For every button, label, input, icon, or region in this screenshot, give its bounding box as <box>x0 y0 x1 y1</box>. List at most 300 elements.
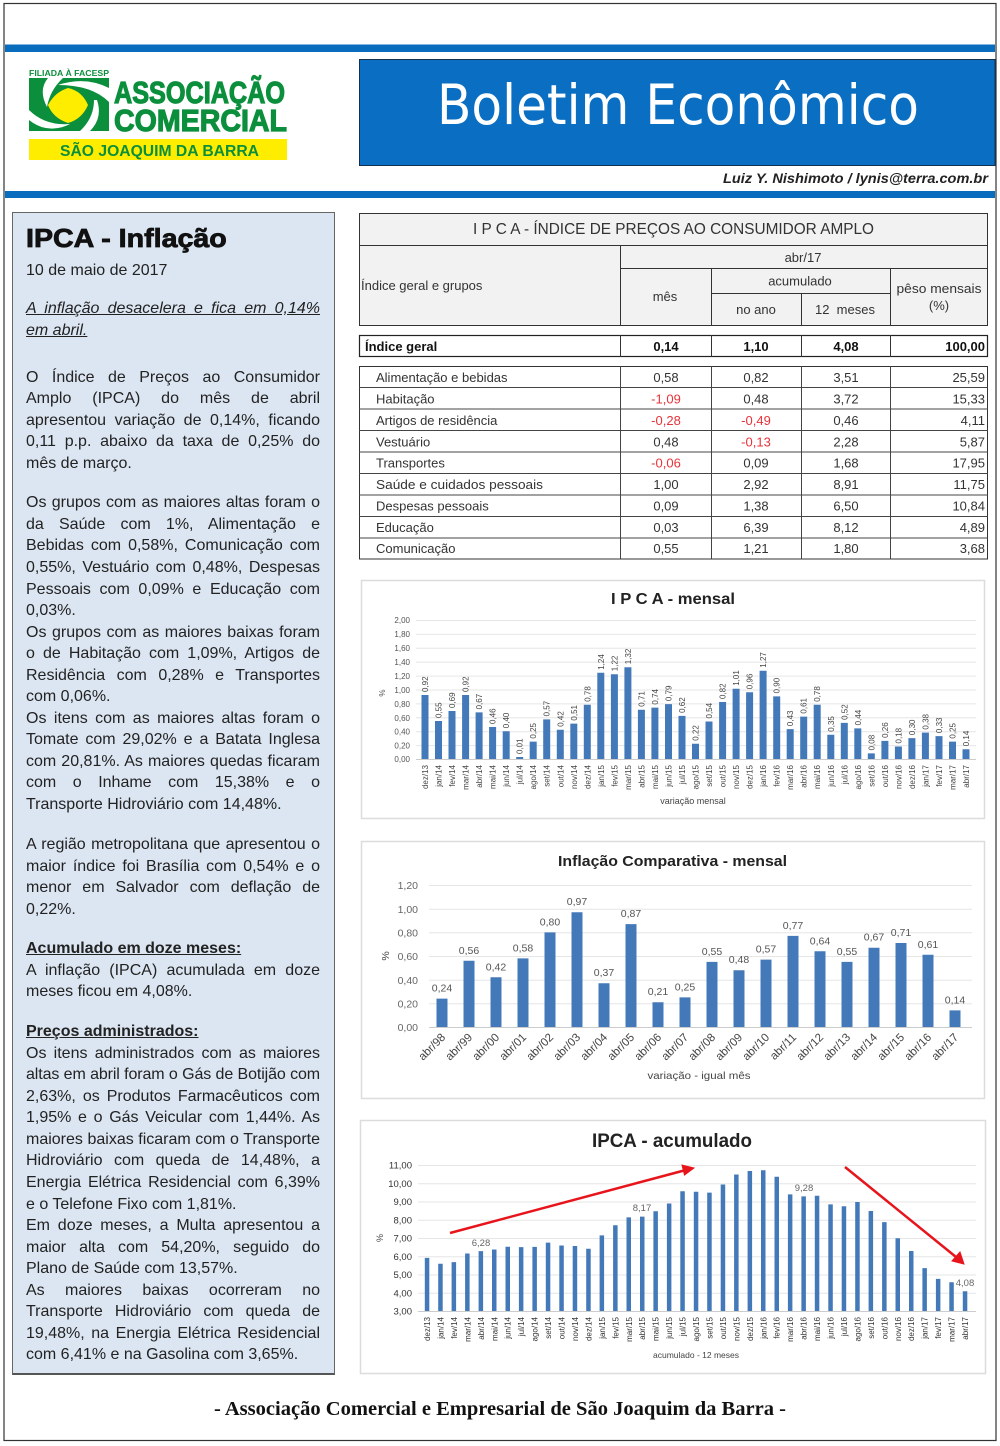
table: IPCA por grupos: 6,50 <box>833 498 859 514</box>
subtitle: A inflação desacelera e fica em 0,14% <box>26 300 320 317</box>
chart: IPCA acumulado: abr/16 <box>800 1316 809 1340</box>
chart: Inflação Comparativa mensal: 0,24 <box>432 983 452 995</box>
chart: IPCA mensal: 0,01 <box>516 738 525 754</box>
chart: Inflação Comparativa mensal <box>362 842 984 1098</box>
table: IPCA por grupos: (%) <box>929 298 949 313</box>
chart: IPCA acumulado: set/14 <box>544 1316 553 1339</box>
section: administered prices <box>26 1023 320 1363</box>
logo: Associação Comercial: COMERCIAL <box>114 103 287 138</box>
chart: IPCA mensal: 0,96 <box>746 673 755 689</box>
chart: IPCA mensal: 0,26 <box>881 722 890 738</box>
paragraph: items: Os itens com as maiores altas foram o <box>26 710 320 727</box>
chart: Inflação Comparativa mensal: % <box>380 951 392 961</box>
chart: Inflação Comparativa mensal: 0,40 <box>398 975 418 987</box>
heading: IPCA - Inflação <box>26 223 227 253</box>
chart: Inflação Comparativa mensal: 0,77 <box>783 920 803 932</box>
chart: Inflação Comparativa mensal: abr/15 <box>876 1032 907 1063</box>
chart: IPCA acumulado: set/16 <box>867 1316 876 1339</box>
chart: IPCA mensal: 0,74 <box>651 688 660 705</box>
table: IPCA por grupos: 8,12 <box>833 520 859 535</box>
chart: IPCA mensal: dez/15 <box>746 764 755 789</box>
chart: IPCA acumulado: out/16 <box>880 1316 889 1339</box>
chart: IPCA mensal: abr/17 <box>962 764 971 788</box>
title banner: Boletim Econômico <box>360 60 995 166</box>
chart: IPCA acumulado: nov/14 <box>571 1316 580 1341</box>
chart: IPCA acumulado: jan/17 <box>921 1316 930 1340</box>
chart: IPCA mensal: 0,79 <box>664 685 674 701</box>
chart: IPCA mensal: fev/15 <box>610 764 619 787</box>
section: administered prices: com 6,41% e na Gasolina com 3,65%. <box>26 1346 298 1363</box>
paragraph: highest groups: Bebidas com 0,58%, Comunicação com <box>26 537 320 554</box>
chart: Inflação Comparativa mensal: abr/08 <box>687 1032 718 1063</box>
table: IPCA por grupos: acumulado <box>768 274 832 288</box>
chart: IPCA mensal: out/15 <box>719 764 728 787</box>
table: IPCA por grupos: mês <box>653 289 678 304</box>
chart: IPCA mensal: 0,40 <box>394 728 411 736</box>
chart: IPCA mensal: nov/16 <box>894 764 903 789</box>
table: IPCA por grupos: no ano <box>736 302 776 317</box>
date: 10 de maio de 2017 <box>26 262 167 279</box>
chart: IPCA mensal: 0,71 <box>637 691 646 707</box>
chart: IPCA acumulado: 8,17 <box>633 1203 651 1214</box>
chart: IPCA mensal: 1,40 <box>394 658 411 667</box>
chart: IPCA acumulado: 3,00 <box>394 1306 412 1318</box>
chart: Inflação Comparativa mensal: 0,56 <box>459 945 479 957</box>
chart: IPCA mensal: I P C A - mensal <box>611 591 735 608</box>
chart: IPCA mensal: out/16 <box>881 764 890 787</box>
table: IPCA por grupos: 0,55 <box>653 541 679 556</box>
chart: IPCA mensal: dez/14 <box>583 764 592 789</box>
chart: IPCA mensal: 0,30 <box>908 719 917 735</box>
section: administered prices: 2,63%, os Produtos Farmacêuticos com <box>26 1088 320 1105</box>
paragraph: lowest groups: Os grupos com as maiores baixas foram <box>26 624 320 640</box>
chart: Inflação Comparativa mensal: 0,61 <box>918 939 938 951</box>
chart: IPCA acumulado: jun/15 <box>665 1316 674 1340</box>
chart: IPCA mensal: mai/15 <box>651 764 660 789</box>
chart: Inflação Comparativa mensal: 0,80 <box>398 928 418 940</box>
chart: IPCA mensal: 0,22 <box>692 725 700 741</box>
chart: IPCA acumulado: jan/14 <box>436 1316 446 1340</box>
logo: Associação Comercial: ASSOCIAÇÃO <box>114 75 285 110</box>
chart: IPCA mensal: 0,78 <box>583 686 592 702</box>
chart: IPCA mensal: mai/14 <box>489 764 498 789</box>
paragraph: metropolitan regions <box>26 836 320 918</box>
logo: Associação Comercial: SÃO JOAQUIM DA BARRA <box>60 140 259 160</box>
chart: Inflação Comparativa mensal: variação - igual mês <box>648 1070 750 1082</box>
chart: IPCA acumulado: mar/16 <box>786 1316 795 1342</box>
chart: IPCA mensal: 0,20 <box>394 742 411 750</box>
chart: IPCA mensal: out/14 <box>556 764 565 787</box>
chart: IPCA acumulado: abr/15 <box>638 1316 647 1340</box>
chart: IPCA mensal: 1,22 <box>610 655 619 671</box>
paragraph: overview: O Índice de Preços ao Consumidor <box>26 368 320 386</box>
table: IPCA por grupos: -0,06 <box>651 456 681 470</box>
chart: IPCA mensal: 0,42 <box>556 711 565 727</box>
table: IPCA por grupos: 12 meses <box>815 302 875 317</box>
table: IPCA por grupos: 0,82 <box>743 370 769 385</box>
chart: IPCA acumulado: mai/14 <box>490 1316 499 1341</box>
chart: IPCA acumulado: fev/16 <box>773 1316 782 1339</box>
chart: IPCA mensal: 0,67 <box>475 693 484 709</box>
chart: IPCA acumulado: acumulado - 12 meses <box>653 1350 739 1360</box>
paragraph: highest groups: Os grupos com as maiores altas foram o <box>26 494 320 511</box>
chart: Inflação Comparativa mensal: abr/06 <box>633 1032 664 1063</box>
chart: IPCA mensal: nov/14 <box>570 764 579 789</box>
chart: IPCA acumulado: out/14 <box>558 1316 566 1339</box>
chart: IPCA mensal: ago/15 <box>692 764 700 789</box>
chart: IPCA mensal: dez/16 <box>908 764 917 789</box>
paragraph: items: Transporte Hidroviário com 14,48%. <box>26 796 282 813</box>
section: accumulated twelve months: A inflação (IPCA) acumulada em doze <box>26 962 320 979</box>
chart: IPCA mensal: 1,01 <box>732 670 741 686</box>
chart: IPCA mensal: 1,00 <box>394 686 411 695</box>
chart: IPCA mensal: 2,00 <box>394 616 411 625</box>
chart: IPCA mensal: 0,78 <box>813 686 822 702</box>
chart: Inflação Comparativa mensal: 0,37 <box>594 967 614 979</box>
table: IPCA por grupos: 0,09 <box>743 456 769 470</box>
chart: IPCA acumulado: 6,28 <box>472 1238 490 1249</box>
chart: Inflação Comparativa mensal: abr/14 <box>849 1031 881 1063</box>
section: administered prices: maiores baixas ficaram com o Transporte <box>26 1131 320 1148</box>
section: administered prices: Em doze meses, a Multa apresentou a <box>26 1217 320 1234</box>
paragraph: metropolitan regions: menor em Salvador com deflação de <box>26 879 320 896</box>
table: IPCA por grupos: 3,51 <box>833 370 859 385</box>
chart: IPCA mensal: 1,27 <box>759 652 768 668</box>
chart: IPCA mensal: 0,25 <box>529 722 538 739</box>
table: IPCA por grupos: -1,09 <box>651 392 681 406</box>
chart: IPCA acumulado: ago/16 <box>853 1316 862 1341</box>
table: IPCA por grupos: 8,91 <box>833 477 859 492</box>
paragraph: metropolitan regions: A região metropolitana que apresentou o <box>26 836 320 853</box>
chart: IPCA acumulado <box>360 1120 986 1374</box>
chart: Inflação Comparativa mensal: 0,60 <box>398 951 418 963</box>
chart: IPCA acumulado: 11,00 <box>389 1160 412 1172</box>
chart: Inflação Comparativa mensal: 0,80 <box>540 916 560 928</box>
chart: IPCA mensal: jul/15 <box>678 764 687 785</box>
chart: IPCA acumulado: 5,00 <box>394 1270 412 1281</box>
chart: IPCA acumulado: ago/15 <box>692 1316 701 1341</box>
table: IPCA por grupos: 0,48 <box>743 392 769 406</box>
chart: Inflação Comparativa mensal: abr/98 <box>417 1032 448 1063</box>
table: IPCA por grupos: 1,10 <box>743 339 769 354</box>
paragraph: overview: Amplo (IPCA) do mês de abril <box>26 390 320 407</box>
chart: Inflação Comparativa mensal: 0,21 <box>648 986 668 998</box>
chart: IPCA mensal: ago/16 <box>854 764 863 789</box>
paragraph: items <box>26 710 320 813</box>
section: accumulated twelve months: Acumulado em doze meses: <box>26 940 241 957</box>
arrow: rising trend <box>450 1165 694 1233</box>
table: IPCA por grupos: Vestuário <box>376 434 430 450</box>
chart: IPCA acumulado: fev/17 <box>934 1316 943 1339</box>
table: IPCA por grupos: Habitação <box>376 392 435 406</box>
subtitle: em abril. <box>26 322 87 339</box>
chart: IPCA mensal: mar/16 <box>786 764 795 790</box>
paragraph: highest groups: da Saúde com 1%, Alimentação e <box>26 516 320 533</box>
arrow: falling trend <box>845 1167 964 1264</box>
chart: IPCA mensal: 0,57 <box>543 700 552 716</box>
chart: IPCA mensal: mar/17 <box>948 764 958 790</box>
section: accumulated twelve months: meses ficou em 4,08%. <box>26 983 192 1000</box>
table: IPCA por grupos: 11,75 <box>953 477 985 492</box>
table: IPCA por grupos: 0,03 <box>653 520 679 535</box>
chart: IPCA mensal: 0,82 <box>719 683 728 699</box>
table: IPCA por grupos: 0,14 <box>653 339 679 354</box>
chart: IPCA mensal: abr/15 <box>637 764 646 788</box>
chart: Inflação Comparativa mensal: abr/02 <box>525 1032 556 1063</box>
chart: IPCA mensal: 0,40 <box>502 712 511 728</box>
chart: IPCA acumulado: nov/16 <box>894 1316 903 1341</box>
table: IPCA por grupos: 2,92 <box>743 477 769 492</box>
chart: IPCA mensal: 0,61 <box>800 697 809 714</box>
author line: Luiz Y. Nishimoto / lynis@terra.com.br <box>723 170 990 186</box>
paragraph: metropolitan regions: maior índice foi Brasília com 0,54% e o <box>26 858 320 875</box>
chart: IPCA acumulado: out/15 <box>719 1316 728 1339</box>
chart: IPCA mensal: abr/14 <box>475 764 484 788</box>
chart: IPCA acumulado: abr/17 <box>961 1316 970 1340</box>
chart: IPCA mensal: % <box>378 689 387 697</box>
table: IPCA por grupos: Despesas pessoais <box>376 498 489 514</box>
chart: Inflação Comparativa mensal: 0,97 <box>567 896 587 908</box>
table: IPCA por grupos: -0,13 <box>741 434 771 450</box>
chart: IPCA mensal: 1,32 <box>624 648 633 664</box>
paragraph: metropolitan regions: 0,22%. <box>26 901 76 918</box>
chart: IPCA acumulado: jan/15 <box>598 1316 607 1340</box>
table: IPCA por grupos: 15,33 <box>952 392 985 406</box>
chart: IPCA acumulado: mai/15 <box>652 1316 661 1341</box>
chart: IPCA acumulado: 7,00 <box>394 1234 412 1244</box>
table: IPCA por grupos: 4,08 <box>833 339 859 354</box>
table: IPCA por grupos: pêso mensais <box>896 281 982 296</box>
chart: IPCA mensal: jan/17 <box>921 764 930 788</box>
paragraph: highest groups: 0,03%. <box>26 602 76 619</box>
table: IPCA por grupos: -0,49 <box>741 413 771 428</box>
paragraph: lowest groups: o de Habitação com 1,09%, Artigos de <box>26 645 320 662</box>
chart: IPCA mensal: nov/15 <box>732 764 741 789</box>
table: IPCA por grupos: I P C A - ÍNDICE DE PREÇOS AO CONSUMIDOR AMPLO <box>473 219 874 238</box>
table: IPCA por grupos: 1,38 <box>743 498 769 514</box>
chart: Inflação Comparativa mensal: 0,55 <box>837 946 857 958</box>
chart: IPCA mensal: 0,51 <box>570 704 579 721</box>
chart: IPCA acumulado: jun/14 <box>504 1316 513 1340</box>
section: administered prices: Hidroviário com queda de 14,48%, a <box>26 1152 320 1169</box>
section: administered prices: Transporte Hidroviário com queda de <box>26 1303 320 1320</box>
chart: IPCA acumulado: jul/14 <box>517 1316 526 1337</box>
chart: Inflação Comparativa mensal: 0,55 <box>702 946 722 958</box>
chart: IPCA acumulado: mai/16 <box>813 1316 822 1341</box>
paragraph: items: com o Inhame com 15,38% e o <box>26 774 320 791</box>
table: IPCA por grupos: Alimentação e bebidas <box>376 370 508 385</box>
table: IPCA por grupos: 4,11 <box>961 413 985 428</box>
table: IPCA por grupos <box>359 213 988 559</box>
section: administered prices: Os itens administrados com as maiores <box>26 1045 320 1062</box>
section: administered prices: altas em abril foram o Gás de Botijão com <box>26 1066 320 1083</box>
chart: IPCA mensal: 0,25 <box>948 722 958 739</box>
table: IPCA por grupos: 0,09 <box>653 498 679 514</box>
chart: IPCA acumulado: ago/14 <box>531 1316 540 1341</box>
chart: IPCA mensal: 0,92 <box>462 676 471 692</box>
chart: Inflação Comparativa mensal: abr/07 <box>660 1032 691 1063</box>
section: administered prices: e o Telefone Fixo com 1,81%. <box>26 1196 236 1213</box>
section: administered prices: 1,95% e o Gás Veicular com 1,44%. As <box>26 1109 320 1126</box>
chart: IPCA mensal: 0,52 <box>840 704 849 720</box>
table: IPCA por grupos: 17,95 <box>952 456 985 470</box>
chart: IPCA mensal: 0,18 <box>894 727 903 744</box>
chart: Inflação Comparativa mensal: 1,00 <box>398 904 418 916</box>
chart: Inflação Comparativa mensal: 0,57 <box>756 944 776 956</box>
chart: Inflação Comparativa mensal: abr/99 <box>444 1032 475 1063</box>
table: IPCA por grupos: abr/17 <box>785 250 821 265</box>
chart: IPCA acumulado: dez/16 <box>907 1316 916 1341</box>
paragraph: overview: mês de março. <box>26 455 132 472</box>
chart: IPCA mensal: variação mensal <box>660 796 726 806</box>
table: IPCA por grupos: 3,72 <box>833 392 859 406</box>
chart: IPCA acumulado: 9,00 <box>394 1197 412 1208</box>
table: IPCA por grupos: 1,80 <box>833 541 859 556</box>
chart: IPCA mensal: jan/14 <box>434 764 444 788</box>
chart: IPCA acumulado: jul/16 <box>840 1316 849 1337</box>
chart: IPCA mensal: jan/15 <box>597 764 606 788</box>
chart: Inflação Comparativa mensal: abr/09 <box>714 1032 745 1063</box>
chart: Inflação Comparativa mensal: 0,48 <box>729 954 749 966</box>
subtitle <box>25 300 320 339</box>
table: IPCA por grupos: 1,00 <box>653 477 679 492</box>
chart: IPCA acumulado: 6,00 <box>394 1252 412 1263</box>
chart: IPCA mensal: 0,92 <box>421 676 430 692</box>
table: IPCA por grupos: Saúde e cuidados pessoais <box>376 477 544 492</box>
chart: IPCA mensal: mai/16 <box>813 764 822 789</box>
chart: IPCA mensal: ago/14 <box>529 764 538 789</box>
table: IPCA por grupos: 4,89 <box>960 520 985 535</box>
chart: IPCA acumulado: jan/16 <box>759 1316 768 1340</box>
chart: IPCA mensal: jan/16 <box>759 764 768 788</box>
chart: IPCA mensal: 0,46 <box>489 708 498 724</box>
table: IPCA por grupos: 6,39 <box>743 520 769 535</box>
chart: IPCA acumulado: fev/15 <box>611 1316 620 1339</box>
table: IPCA por grupos: 10,84 <box>952 498 985 514</box>
chart: IPCA mensal: 0,33 <box>935 717 944 733</box>
table: IPCA por grupos: -0,28 <box>651 413 681 428</box>
table: IPCA por grupos: 1,68 <box>833 456 859 470</box>
section: administered prices: 19,48%, na Energia Elétrica Residencial <box>26 1325 320 1342</box>
chart: IPCA acumulado: dez/13 <box>423 1316 432 1341</box>
chart: IPCA acumulado: dez/14 <box>584 1316 593 1341</box>
table: IPCA por grupos: 2,28 <box>833 434 859 450</box>
chart: IPCA mensal: 0,80 <box>394 700 411 709</box>
chart: Inflação Comparativa mensal: abr/04 <box>579 1031 611 1063</box>
chart: IPCA mensal: 1,24 <box>597 654 606 670</box>
chart: IPCA mensal: mar/14 <box>462 764 471 790</box>
chart: Inflação Comparativa mensal: abr/05 <box>606 1032 637 1063</box>
paragraph: lowest groups: Residência com 0,28% e Transportes <box>26 667 320 684</box>
chart: IPCA mensal: jun/15 <box>664 764 674 788</box>
chart: IPCA mensal: dez/13 <box>421 764 430 789</box>
chart: IPCA acumulado: 10,00 <box>388 1179 412 1190</box>
paragraph: overview: apresentou variação de 0,14%, ficando <box>26 412 320 429</box>
chart: Inflação Comparativa mensal: abr/16 <box>903 1032 934 1063</box>
table: IPCA por grupos: 1,21 <box>743 541 769 556</box>
panel: IPCA - Inflação article <box>12 212 335 1375</box>
chart: IPCA mensal: jun/14 <box>502 764 511 788</box>
chart: IPCA acumulado: fev/14 <box>450 1316 459 1339</box>
paragraph: highest groups: 0,55%, Vestuário com 0,48%, Despesas <box>26 559 320 576</box>
chart: IPCA mensal <box>362 580 984 818</box>
section: administered prices: maior alta com 54,20%, seguido do <box>26 1239 320 1256</box>
table: IPCA por grupos: 25,59 <box>952 370 985 385</box>
chart: IPCA mensal: 0,60 <box>394 714 411 723</box>
chart: IPCA mensal: fev/14 <box>448 764 457 787</box>
chart: IPCA mensal: 0,00 <box>394 755 411 764</box>
chart: Inflação Comparativa mensal: 0,87 <box>621 908 641 920</box>
chart: IPCA acumulado: mar/17 <box>948 1316 957 1342</box>
section: administered prices: As maiores baixas ocorreram no <box>26 1282 320 1299</box>
table: IPCA por grupos: Transportes <box>376 456 445 470</box>
chart: IPCA mensal: 0,69 <box>448 692 457 708</box>
table: IPCA por grupos: 3,68 <box>960 541 985 556</box>
chart: IPCA acumulado: 4,00 <box>394 1288 412 1300</box>
chart: IPCA mensal: fev/16 <box>773 764 782 787</box>
chart: IPCA mensal: set/16 <box>867 764 876 787</box>
chart: Inflação Comparativa mensal: abr/13 <box>822 1032 853 1063</box>
paragraph: overview <box>26 368 320 472</box>
chart: Inflação Comparativa mensal: abr/10 <box>741 1032 772 1063</box>
chart: IPCA mensal: 0,54 <box>705 702 714 718</box>
chart: IPCA acumulado: IPCA - acumulado <box>592 1131 752 1152</box>
section: administered prices: Plano de Saúde com 13,57%. <box>26 1260 238 1277</box>
section: accumulated twelve months <box>26 940 320 1000</box>
table: IPCA por grupos: Educação <box>376 520 434 535</box>
table: IPCA por grupos: Índice geral e grupos <box>361 278 483 293</box>
logo: Associação Comercial: FILIADA À FACESP <box>29 69 110 78</box>
chart: IPCA mensal: 1,60 <box>394 644 411 653</box>
chart: IPCA mensal: 0,62 <box>678 697 687 713</box>
chart: IPCA acumulado: % <box>375 1234 385 1242</box>
chart: Inflação Comparativa mensal: 0,25 <box>675 981 695 993</box>
paragraph: highest groups: Pessoais com 0,09% e Educação com <box>26 581 320 598</box>
chart: IPCA mensal: 0,14 <box>962 730 971 746</box>
chart: IPCA acumulado: set/15 <box>706 1316 714 1339</box>
chart: IPCA acumulado: 8,00 <box>394 1216 412 1226</box>
chart: IPCA mensal: 0,43 <box>786 710 795 726</box>
chart: IPCA acumulado: dez/15 <box>746 1316 755 1341</box>
title banner: Boletim Econômico: Boletim Econômico <box>437 73 919 137</box>
chart: Inflação Comparativa mensal: 1,20 <box>398 880 418 892</box>
chart: IPCA mensal: 1,80 <box>394 630 411 639</box>
chart: IPCA mensal: 0,44 <box>854 709 863 725</box>
chart: IPCA mensal: set/14 <box>543 764 552 787</box>
chart: Inflação Comparativa mensal: 0,20 <box>398 998 418 1010</box>
table: IPCA por grupos: 0,58 <box>653 370 679 385</box>
table: IPCA por grupos: Comunicação <box>376 541 456 556</box>
table: IPCA por grupos: 100,00 <box>945 339 985 354</box>
chart: IPCA mensal: 0,55 <box>434 702 444 718</box>
chart: Inflação Comparativa mensal: abr/00 <box>471 1032 502 1063</box>
chart: IPCA mensal: jul/16 <box>840 764 849 785</box>
paragraph: items: com 20,81%. As maiores quedas ficaram <box>26 753 320 770</box>
chart: Inflação Comparativa mensal: 0,42 <box>486 961 506 973</box>
logo: Associação Comercial <box>29 69 287 160</box>
chart: IPCA mensal: 0,35 <box>827 716 836 732</box>
paragraph: highest groups <box>26 494 320 619</box>
chart: Inflação Comparativa mensal: abr/12 <box>795 1032 826 1063</box>
paragraph: items: Tomate com 29,02% e a Batata Inglesa <box>26 731 320 748</box>
chart: Inflação Comparativa mensal: 0,64 <box>810 935 830 947</box>
chart: Inflação Comparativa mensal: abr/11 <box>768 1032 799 1063</box>
chart: IPCA mensal: fev/17 <box>935 764 944 787</box>
chart: IPCA mensal: jul/14 <box>516 764 525 785</box>
chart: Inflação Comparativa mensal: abr/03 <box>552 1032 583 1063</box>
chart: IPCA mensal: 0,08 <box>867 734 876 750</box>
table: IPCA por grupos: 0,46 <box>833 413 859 428</box>
